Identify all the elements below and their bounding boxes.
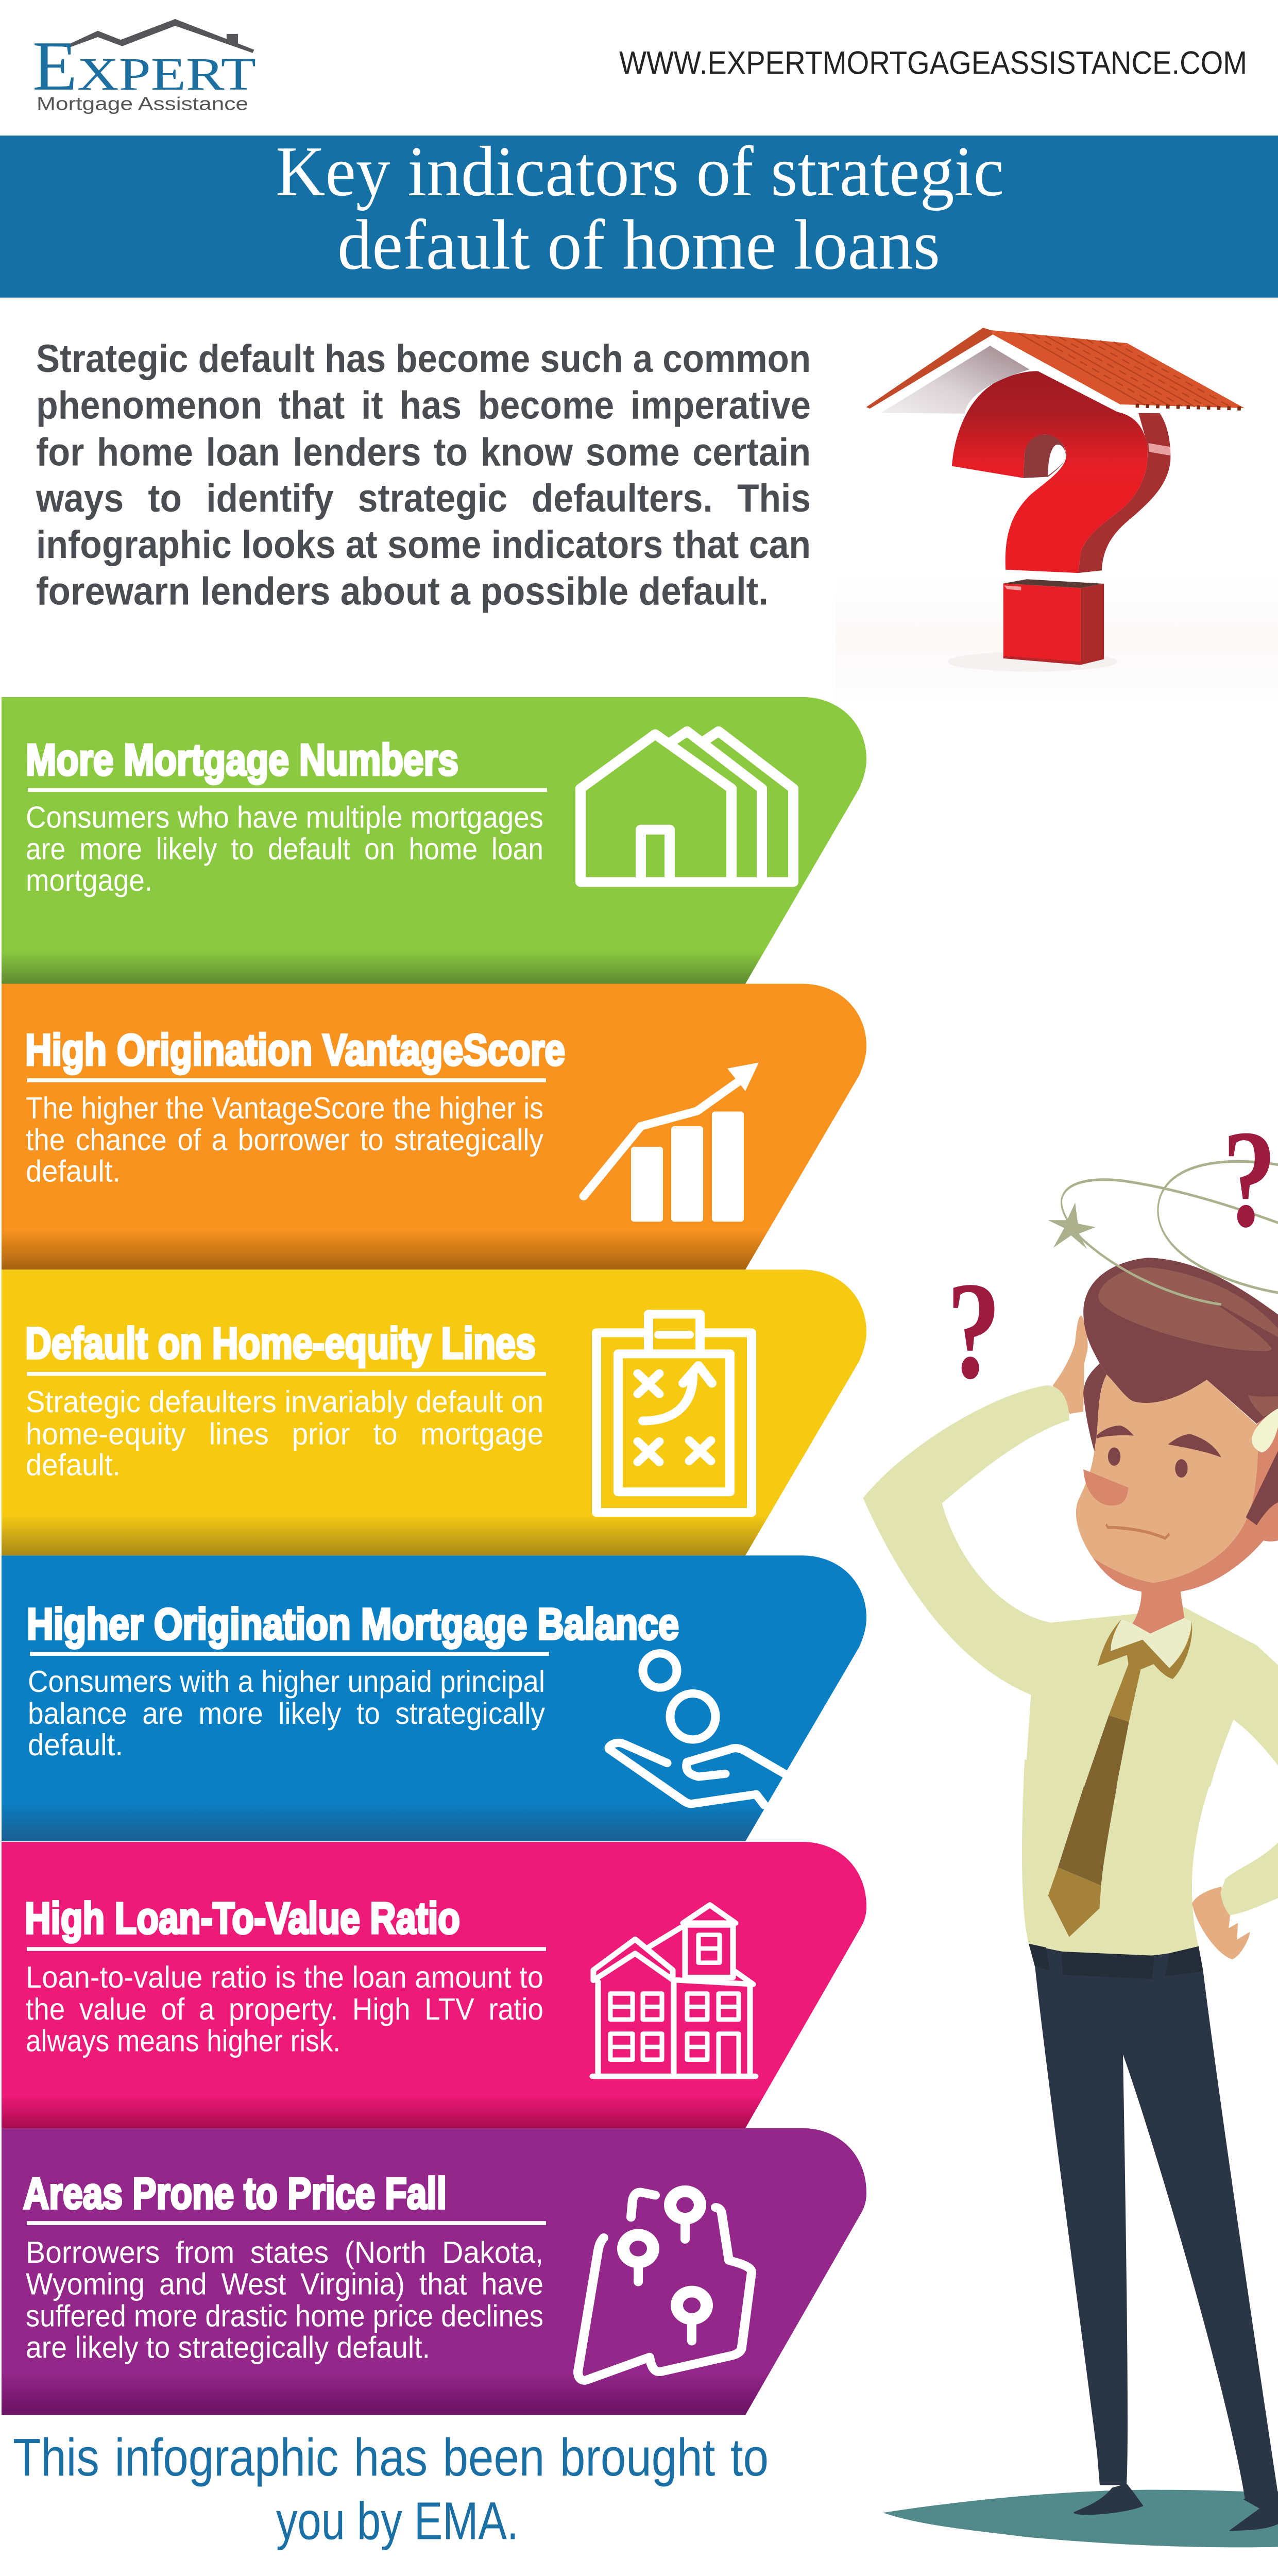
body text: always means higher risk. [26,2024,340,2058]
intro paragraph [36,336,811,613]
logo roof icon [63,19,254,53]
icon: row of houses [581,731,793,882]
body text: are likely to strategically default. [26,2330,430,2364]
footer note: you by EMA. [276,2492,519,2551]
body text [26,1091,544,1188]
heading: High Origination VantageScore [25,1025,565,1075]
body text: default. [26,1448,121,1482]
panel: high origination vantagescore [2,984,866,1269]
heading: Higher Origination Mortgage Balance [27,1600,679,1649]
body text: Consumers who have multiple mortgages [26,800,543,834]
body text: the chance of a borrower to strategically [26,1123,544,1157]
body text: Borrowers from states (North Dakota, [26,2235,543,2269]
legs and lower shirt [1022,1759,1278,2531]
body text [28,1665,546,1761]
intro paragraph: phenomenon that it has become imperative [36,383,811,427]
body text: balance are more likely to strategically [28,1696,546,1731]
icon: red question mark with roof [836,328,1278,701]
body text: Strategic defaulters invariably default on [26,1384,543,1418]
body text: mortgage. [26,863,152,897]
title banner [0,131,1278,298]
intro paragraph: Strategic default has become such a common [36,336,811,381]
logo wordmark: E [32,27,77,105]
footer note: This infographic has been brought to [13,2429,769,2487]
body text: default. [28,1727,123,1761]
heading: Default on Home-equity Lines [25,1318,536,1368]
panel: default on home-equity lines [2,1269,866,1555]
icon: hand with coins [609,1653,785,1805]
intro paragraph: infographic looks at some indicators that can [36,522,811,567]
body text: the value of a property. High LTV ratio [26,1992,543,2026]
icon: map with location pins [578,2191,752,2380]
illustration: confused man [863,1101,1278,2547]
body text: Consumers with a higher unpaid principal [28,1665,545,1699]
title text [276,131,1004,284]
title text: Key indicators of strategic [276,131,1004,211]
icon: rising bar chart [584,1063,759,1222]
body text: The higher the VantageScore the higher is [26,1091,543,1125]
panel: higher origination mortgage balance [2,1555,866,1841]
body text: are more likely to default on home loan [26,832,543,866]
body text [26,1960,543,2058]
dizzy star [1048,1202,1096,1249]
body text: home-equity lines prior to mortgage [26,1417,543,1451]
intro paragraph: forewarn lenders about a possible default. [36,569,769,613]
body text [26,1384,543,1482]
upper body and head [863,1161,1278,1788]
ground shadow [883,2490,1278,2547]
body text: Wyoming and West Virginia) that have [26,2267,543,2301]
intro paragraph: ways to identify strategic defaulters. This [36,476,811,520]
panel: areas prone to price fall [2,2128,866,2415]
body text: Loan-to-value ratio is the loan amount to [26,1960,543,1994]
footer note [13,2429,769,2551]
body text [26,800,543,897]
logo [32,19,256,114]
icon: townhouse building [592,1905,756,2076]
icon: clipboard with game plan [597,1314,752,1513]
logo tagline: Mortgage Assistance [37,93,248,114]
logo wordmark: XPERT [77,48,256,100]
body text: default. [26,1154,121,1188]
panel: more mortgage numbers [2,697,866,984]
heading: Areas Prone to Price Fall [23,2169,447,2218]
intro paragraph: for home loan lenders to know some certain [36,430,811,474]
title text: default of home loans [337,205,940,284]
body text [26,2235,543,2364]
body text: suffered more drastic home price declines [26,2299,543,2333]
heading: High Loan-To-Value Ratio [25,1894,460,1943]
heading: More Mortgage Numbers [26,735,458,784]
panel: high loan-to-value ratio [2,1842,866,2128]
dizzy swirls [1061,1161,1278,1304]
question mark left: ? [947,1253,1001,1408]
